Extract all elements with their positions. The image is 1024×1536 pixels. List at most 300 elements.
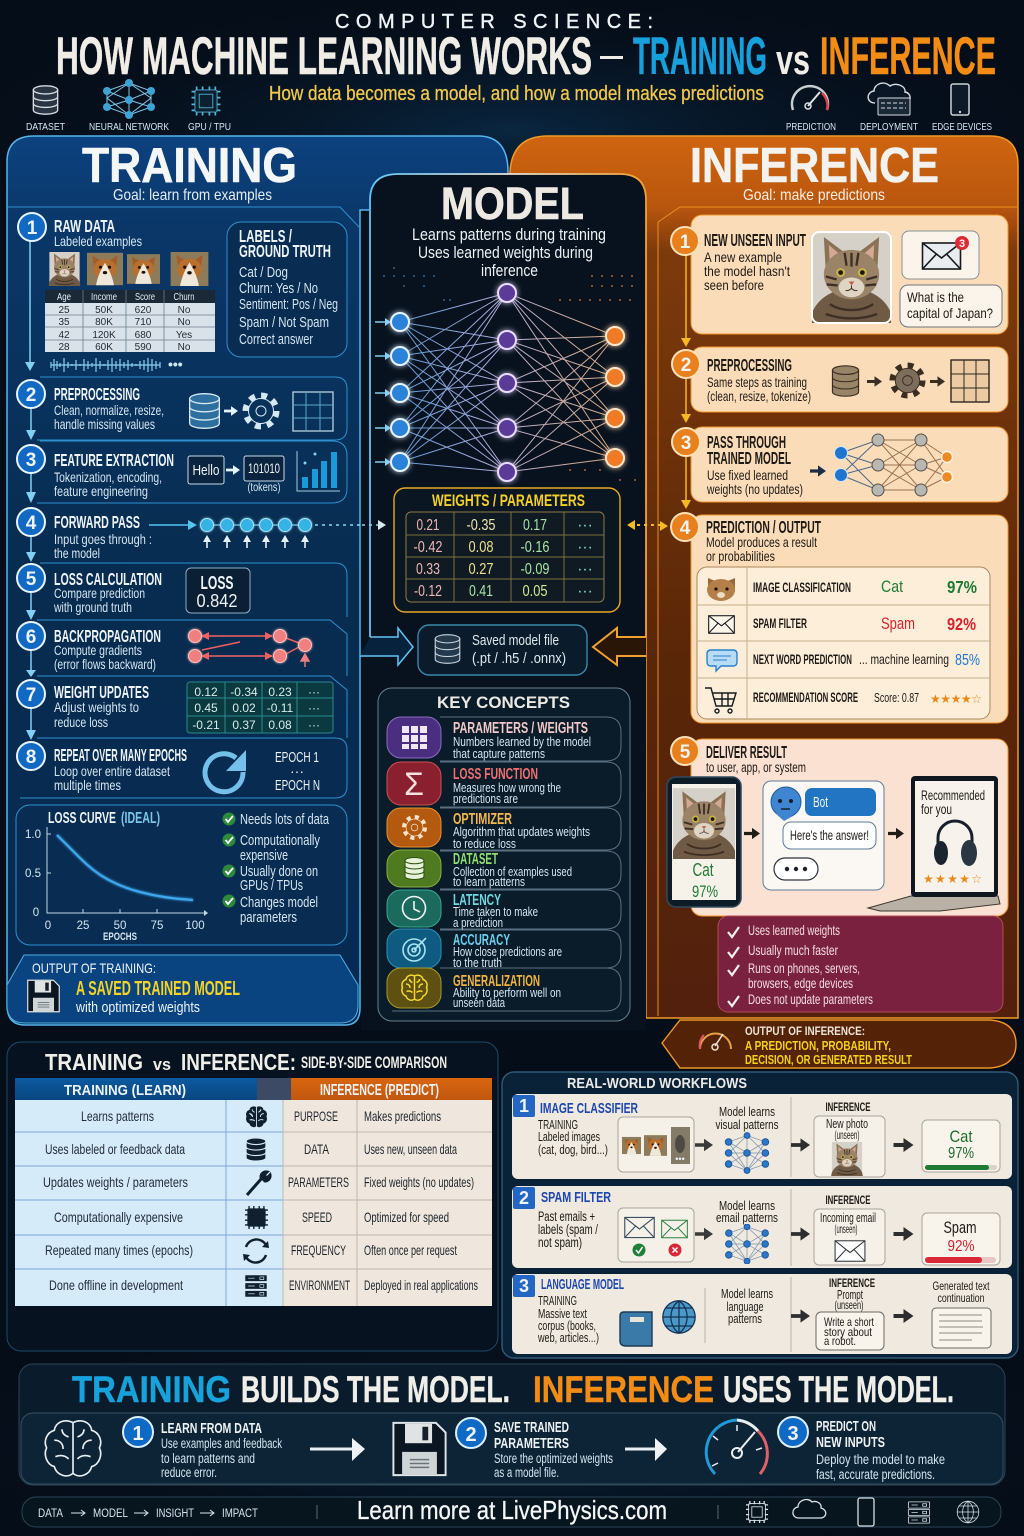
comparison table: SPEED [302,1209,332,1225]
phone with cat result: Cat [692,860,714,880]
saved model file: (.pt / .h5 / .onnx) [472,651,566,667]
input arrows [375,318,391,466]
concept: dataset: to learn patterns [453,875,525,889]
step 3 pass through model: Use fixed learned [707,467,788,483]
step 3 feature extraction [17,445,340,499]
comparison heading: INFERENCE: [181,1049,296,1075]
concept: accuracy: How close predictions are [453,945,562,959]
footer flow: DATA [38,1508,63,1520]
inference checklist: Does not update parameters [748,991,873,1007]
output of training [7,955,358,1023]
footer flow: INSIGHT [156,1508,194,1520]
inference checklist: Runs on phones, servers, [748,960,860,976]
weights table: -0.35 [466,517,496,534]
step 2 save: PARAMETERS [494,1435,569,1452]
concept: generalization: unseen data [453,996,505,1010]
step 2 save: as a model file. [494,1465,559,1480]
data table: 710 [135,317,152,328]
icon: dataset [26,86,65,133]
arrow [625,1438,667,1461]
footer flow: MODEL [93,1508,129,1520]
weights table [394,488,620,612]
loss curve panel: (IDEAL) [121,810,160,827]
concept: dataset [387,850,572,889]
line chart: 75 [151,920,163,932]
step 1 raw data: RAW DATA [54,216,115,236]
step 5 loss calculation: 5 [26,569,37,590]
icon: chat bubble [707,650,737,671]
step 7 weight updates [17,680,333,733]
icon: cart [705,688,736,713]
key concepts: KEY CONCEPTS [437,693,570,712]
comparison table: FREQUENCY [291,1242,346,1258]
data table: Yes [176,330,192,341]
output: spam 92 percent: Spam [944,1218,976,1237]
workflow 1 image classifier: Model learns [719,1104,775,1119]
weights table: 0.27 [468,561,494,578]
speech bubble [900,285,1002,327]
workflow 3 language model: TRAINING [538,1294,577,1308]
line chart: 50 [114,920,126,932]
updated weights table: 0.02 [232,701,256,715]
output: cat 97 percent: 97% [948,1145,974,1162]
inference input photo: New photo [826,1117,868,1131]
training images [618,1117,694,1172]
prompt box: story about [824,1325,873,1339]
weights table: ··· [577,561,593,578]
model description: Uses learned weights during [418,244,593,262]
phone with cat result [667,777,741,907]
step 3 feature extraction: 3 [26,450,36,471]
concept: accuracy: ACCURACY [453,932,510,949]
waveform: ••• [168,356,183,372]
weights table: ··· [577,517,593,534]
incoming email: Incoming email [820,1211,876,1225]
step 4 prediction output: PREDICTION / OUTPUT [706,517,821,537]
prompt box: Write a short [824,1315,874,1329]
step 3 predict: 3 [787,1423,799,1445]
comparison heading: SIDE-BY-SIDE COMPARISON [301,1053,447,1072]
step 4 forward pass: FORWARD PASS [54,512,140,532]
heading: model: MODEL [441,178,584,229]
concept: dataset: Collection of examples used [453,865,572,879]
loss curve panel: LOSS CURVE [48,810,116,827]
image thumbnails [49,252,208,300]
step 4 prediction output [671,513,1008,723]
inference checklist: browsers, edge devices [748,975,853,991]
panel: summary [19,1364,1005,1485]
weights table: 0.41 [469,583,493,600]
icon: neural network [89,79,169,133]
training checklist: Needs lots of data [240,812,330,828]
token and chart icons: 101010 [248,460,280,476]
step 1 new unseen input: seen before [704,277,764,293]
output of training: with optimized weights [75,999,200,1016]
output: spam 92 percent: 92% [948,1238,974,1255]
concept: loss function: Measures how wrong the [453,781,561,795]
step 1 learn: reduce error. [161,1465,217,1480]
weights table: ··· [577,583,593,600]
labels box: Spam / Not Spam [239,315,329,331]
prompt box [816,1312,884,1350]
comparison table: PURPOSE [294,1108,338,1124]
icon: gauge [706,1420,767,1474]
step 1 new unseen input: A new example [704,249,782,265]
step 3 feature extraction: feature engineering [54,483,148,499]
concept: generalization [387,968,561,1010]
results table: 92% [947,614,976,634]
workflow 2 spam filter: Model learns [719,1198,775,1213]
workflow 3 language model: Prompt [837,1288,863,1302]
concept: loss function: LOSS FUNCTION [453,766,538,783]
updated weights table: ··· [308,685,320,699]
output: cat 97 percent: Cat [950,1127,973,1146]
weights table: -0.16 [520,539,550,556]
line chart: 0 [33,907,39,919]
step 5 loss calculation [17,564,250,615]
icon: cat face [707,578,735,601]
comparison table: TRAINING (LEARN) [64,1082,186,1099]
workflow 1 image classifier: IMAGE CLASSIFIER [540,1100,638,1117]
workflow 1 image classifier: visual patterns [716,1117,779,1132]
concept: parameters [387,717,591,761]
footer icons [746,1498,979,1526]
main title: HOW MACHINE LEARNING WORKS [56,27,592,86]
step 7 weight updates: 7 [26,685,36,706]
step 2 preprocessing: Clean, normalize, resize, [54,402,164,418]
data table: No [178,342,191,353]
step 7 weight updates: reduce loss [54,714,108,730]
step 4 prediction output: 4 [680,518,691,539]
weights table: 0.08 [468,539,494,556]
chat card: Here's the answer! [790,827,869,843]
workflow 3 language model: LANGUAGE MODEL [541,1276,624,1293]
output: spam 92 percent [922,1213,1000,1265]
waveform [51,356,183,372]
workflow 3 language model: (unseen) [834,1298,864,1312]
comparison heading: TRAINING [45,1049,143,1075]
results table: IMAGE CLASSIFICATION [753,579,851,595]
concept: generalization: Ability to perform well on [453,986,561,1000]
training checklist: parameters [240,910,297,926]
labels box: Churn: Yes / No [239,281,318,297]
token and chart icons [188,451,340,494]
icon: edge device: EDGE DEVICES [932,121,992,133]
step 8 repeat epochs: EPOCH N [275,777,320,794]
line chart [25,827,208,943]
footer flow [38,1508,258,1520]
line chart: 25 [77,920,89,932]
icon: deployment cloud [860,83,918,133]
output of inference [662,1020,1016,1068]
updated weights table [187,682,333,733]
loss value box: 0.842 [196,591,238,611]
step 4 prediction output: Model produces a result [706,534,817,550]
panel: comparison [7,1042,498,1351]
model description: inference [481,262,538,280]
workflow 2 spam filter [512,1186,1012,1268]
training checklist [222,812,330,926]
kicker: COMPUTER SCIENCE: [335,11,653,33]
results table: 97% [947,577,977,597]
step 2 preprocessing [17,380,333,432]
step 8 repeat epochs: multiple times [54,777,121,793]
panel: inference [510,136,1018,1068]
arrow: saved model to inference [593,628,646,665]
workflow 2 spam filter: labels (spam / [538,1222,598,1237]
updated weights table: 0.37 [232,718,256,732]
chat card [763,781,884,890]
data table: Income [91,291,117,303]
heading: inference: INFERENCE [690,139,939,193]
heading: training: TRAINING [82,139,297,193]
chat card: Bot [813,794,829,811]
inference checklist: Uses learned weights [748,922,840,938]
concept: parameters: that capture patterns [453,747,545,761]
goal: inference: Goal: make predictions [743,187,885,204]
comparison table: ENVIRONMENT [289,1277,350,1293]
training emails [618,1208,694,1262]
step 1 raw data: 1 [27,218,38,239]
workflow 3 language model: web, articles...) [537,1330,599,1345]
step 1 new unseen input [671,215,1008,359]
step 4 prediction output: or probabilities [706,548,775,564]
step 4 forward pass: 4 [26,513,37,534]
data table: 35 [58,317,70,328]
step 4 forward pass [17,508,380,561]
step 2 preprocessing: 2 [26,385,36,406]
step 6 backpropagation: 6 [26,627,36,648]
concept: optimizer: Algorithm that updates weights [453,825,590,839]
concept: latency: a prediction [453,916,503,930]
comparison table: Done offline in development [49,1277,183,1293]
training images: ••• [675,1154,685,1164]
loss value box [186,568,250,613]
labels box: Cat / Dog [239,265,288,281]
step 1 learn [123,1417,282,1480]
workflow 1 image classifier: INFERENCE [826,1102,871,1114]
laptop recommendation: ★★★★☆ [923,872,982,886]
icon: email badge [902,231,979,279]
weights table: WEIGHTS / PARAMETERS [432,492,585,510]
row frames [20,377,347,798]
step 3 pass through model: TRAINED MODEL [707,448,791,468]
step 3 predict: fast, accurate predictions. [816,1467,935,1482]
icon: prediction gauge [786,86,836,133]
workflow 3 language model: corpus (books, [538,1318,596,1333]
results table: RECOMMENDATION SCORE [753,689,858,705]
concept: accuracy [387,929,562,970]
step 3 predict [778,1417,945,1482]
concept: loss function: Σ [404,766,424,802]
step 3 pass through model: 3 [681,433,691,454]
results table: 85% [955,652,980,669]
footer flow: IMPACT [222,1508,258,1520]
icon: prediction gauge: PREDICTION [786,121,836,133]
weights table: -0.12 [414,583,442,600]
inference checklist: Usually much faster [748,942,838,958]
model description: Learns patterns during training [412,226,606,244]
header [26,11,996,133]
step 4 forward pass: Input goes through : [54,531,152,547]
step 3 pass through model: weights (no updates) [706,481,803,497]
step 3 predict: PREDICT ON [816,1418,876,1435]
weights table: 0.33 [416,561,440,578]
inference input photo: (unseen) [834,1128,860,1142]
updated weights table: -0.21 [192,718,220,732]
concept: generalization: GENERALIZATION [453,973,540,990]
footer bar [22,1495,1001,1527]
step 2 save: 2 [465,1424,477,1446]
concept: accuracy: to the truth [453,956,502,970]
labels box: LABELS / [239,226,292,246]
icon: book and globe [620,1301,695,1346]
results table: Cat [881,577,903,596]
training checklist: Computationally [240,833,321,849]
line chart: EPOCHS [103,931,137,943]
step 1 learn: 1 [132,1423,144,1445]
image: cat [810,232,893,359]
concept: optimizer [387,808,590,851]
panel: real-world workflows [502,1072,1018,1358]
icon: cycle arrow [205,750,246,792]
comparison table: Often once per request [364,1242,457,1258]
training checklist: GPUs / TPUs [240,878,303,894]
comparison table: Fixed weights (no updates) [364,1174,474,1190]
comparison table: Optimized for speed [364,1209,449,1225]
step 6 backpropagation [17,622,312,672]
comparison table: Learns patterns [81,1108,154,1124]
forward pass nodes [149,518,380,548]
step 5 loss calculation: Compare prediction [54,585,145,601]
step 5 deliver result: DELIVER RESULT [706,742,787,762]
data table: 680 [135,330,152,341]
data table: 25 [58,305,70,316]
step 5 deliver result [667,737,1008,916]
updated weights table: ··· [308,718,320,732]
saved model file [418,625,587,675]
updated weights table: 0.23 [268,685,292,699]
updated weights table: 0.08 [268,718,292,732]
comparison table: Updates weights / parameters [43,1174,188,1190]
workflow 3 language model: continuation [938,1291,984,1305]
results table: Spam [881,614,915,633]
data table: Age [57,291,71,303]
workflow 3 language model: language [726,1299,764,1314]
comparison table: Uses labeled or feedback data [45,1141,185,1157]
speech bubble: capital of Japan? [907,305,993,321]
weights table: -0.09 [520,561,550,578]
step 7 weight updates: WEIGHT UPDATES [54,682,149,702]
step 8 repeat epochs: ··· [290,763,304,779]
labels box: GROUND TRUTH [239,241,331,261]
token and chart icons: Hello [192,462,220,479]
speech bubble: What is the [907,289,964,305]
labels box: Correct answer [239,332,313,348]
results table: ... machine learning [859,651,949,667]
updated weights table: -0.11 [267,701,294,715]
saved model file: Saved model file [472,633,559,649]
icon: database to gear to grid [832,360,989,402]
line chart: 0.5 [25,868,41,880]
updated weights table: 0.45 [194,701,218,715]
icon: dataset: DATASET [26,121,65,133]
step 8 repeat epochs: EPOCH 1 [275,749,319,766]
workflow 2 spam filter: INFERENCE [826,1195,871,1207]
main title: TRAINING [633,27,767,86]
step 1 learn: LEARN FROM DATA [161,1420,262,1437]
workflow 3 language model: INFERENCE [829,1278,875,1290]
training checklist: Usually done on [240,864,318,880]
concept: optimizer: to reduce loss [453,837,516,851]
step 1 new unseen input: 1 [680,232,691,253]
data table: No [178,317,191,328]
workflow 2 spam filter: Past emails + [538,1209,595,1224]
weights table: -0.42 [414,539,442,556]
weights table: 0.05 [522,583,548,600]
workflow 1 image classifier: 1 [519,1096,529,1116]
workflow 3 language model: Massive text [538,1306,587,1321]
data table: 590 [135,342,152,353]
training checklist: Changes model [240,895,318,911]
updated weights table: -0.34 [230,685,258,699]
comparison table: INFERENCE (PREDICT) [320,1082,439,1099]
laptop recommendation [868,776,1000,911]
red backprop diagram [188,630,312,667]
icon: brain [45,1421,101,1476]
workflow 2 spam filter: SPAM FILTER [541,1189,611,1206]
comparison heading: vs [153,1055,171,1074]
comparison table: Deployed in real applications [364,1277,478,1293]
labels box [227,222,347,357]
step 8 repeat epochs: Loop over entire dataset [54,763,170,779]
icon: floppy disk [28,980,59,1012]
workflow 1 image classifier: (cat, dog, bird...) [538,1142,608,1157]
step 3 pass through model: PASS THROUGH [707,432,786,452]
step 6 backpropagation: Compute gradients [54,642,142,658]
data table: 60K [95,342,113,353]
workflow 3 language model: patterns [728,1311,762,1326]
workflow 2 spam filter: email patterns [716,1210,778,1225]
inference checklist [718,916,1003,1012]
results table: Score: 0.87 [874,690,919,705]
training checklist: expensive [240,848,288,864]
workflow 1 image classifier: TRAINING [538,1118,578,1132]
results table: NEXT WORD PREDICTION [753,651,852,667]
concept: dataset: DATASET [453,851,498,868]
data table: Score [135,291,155,303]
comparison table: DATA [304,1141,329,1157]
data table: 80K [95,317,113,328]
step 2 save: SAVE TRAINED [494,1419,569,1436]
results table [697,567,990,719]
comparison table: Computationally expensive [54,1209,183,1225]
comparison table: PARAMETERS [288,1174,349,1190]
icon: deployment cloud: DEPLOYMENT [860,121,918,133]
laptop recommendation: Recommended [921,787,985,803]
arrow: step heads [660,338,691,531]
step 1 raw data [18,213,347,372]
step 2 save: Store the optimized weights [494,1451,613,1466]
labels box: Sentiment: Pos / Neg [239,297,338,313]
incoming email: (unseen) [834,1222,858,1236]
step 2 preprocessing: PREPROCESSING [707,355,792,375]
main title: vs [776,36,810,83]
website: Learn more at LivePhysics.com [357,1495,667,1525]
comparison table: Makes predictions [364,1108,441,1124]
step 3 feature extraction: FEATURE EXTRACTION [54,450,174,470]
concept: optimizer: OPTIMIZER [453,811,512,828]
